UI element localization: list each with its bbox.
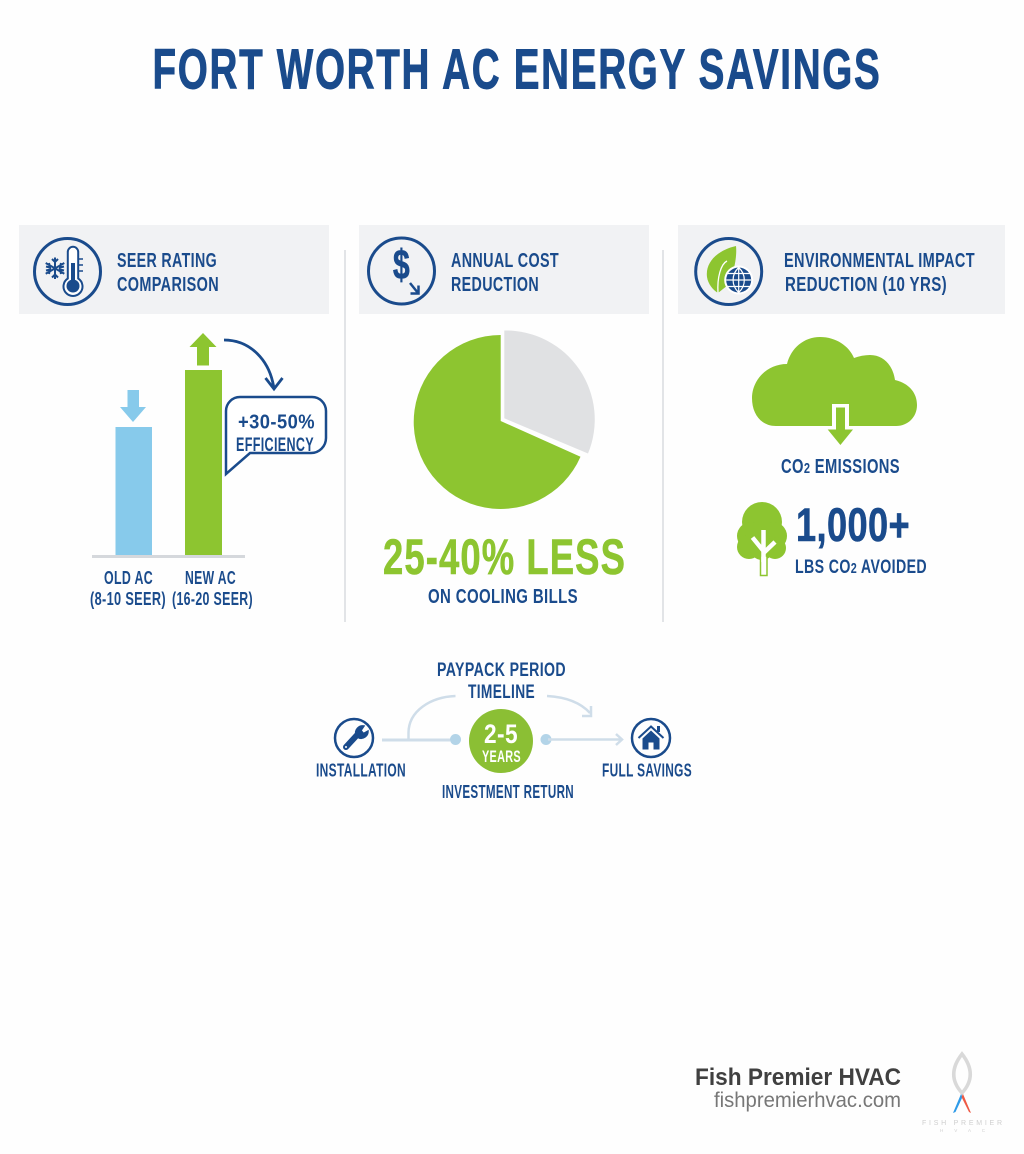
panel header: SEER	[19, 225, 329, 314]
icon: leaf and globe	[696, 238, 762, 304]
panel header: cost	[359, 225, 649, 314]
pie chart	[414, 330, 595, 509]
heading: cost: ANNUAL COST	[451, 249, 559, 272]
badge: 2-5 years: YEARS	[482, 747, 521, 766]
icon: wrench	[335, 719, 373, 757]
stat: 1,000+: 1,000+	[796, 498, 910, 551]
connector: start	[382, 738, 450, 742]
label: old AC: (8-10 SEER)	[90, 588, 166, 609]
badge: 2-5 years	[469, 709, 533, 773]
arrow: up	[190, 333, 216, 366]
label: old AC: OLD AC	[104, 567, 153, 588]
icon: dollar sign with down arrow	[368, 238, 434, 304]
slice: remaining	[504, 330, 595, 454]
label: CO2 emissions: CO2 EMISSIONS	[781, 456, 900, 478]
label: installation: INSTALLATION	[316, 760, 406, 780]
big stat: 25-40% LESS	[383, 529, 626, 585]
panel: environmental impact	[678, 225, 1005, 578]
payback period timeline	[316, 660, 692, 802]
timeline heading: TIMELINE	[468, 682, 535, 703]
stat caption: LBS CO2 AVOIDED	[795, 557, 927, 578]
icon: thermometer and snowflake	[34, 238, 100, 304]
heading: SEER: COMPARISON	[117, 273, 219, 296]
bar: new AC	[185, 370, 222, 555]
arrow: down	[120, 390, 146, 422]
heading: cost: REDUCTION	[451, 273, 539, 296]
icon: dollar sign with down arrow: $	[393, 241, 410, 288]
node: end	[540, 734, 552, 745]
bar chart	[90, 333, 253, 609]
label: full savings: FULL SAVINGS	[602, 760, 692, 780]
stat caption: ON COOLING BILLS	[428, 586, 578, 608]
logo	[922, 1054, 1002, 1133]
node: start	[450, 734, 461, 745]
badge: 2-5 years: 2-5	[484, 719, 518, 749]
arrow: right arc	[547, 696, 591, 716]
icon: house	[632, 719, 670, 757]
brand URL: fishpremierhvac.com	[714, 1089, 901, 1112]
icon: tree	[737, 502, 787, 576]
logo: H V A C	[940, 1128, 986, 1133]
callout: efficiency: EFFICIENCY	[236, 435, 314, 456]
brand name: Fish Premier HVAC	[695, 1064, 901, 1091]
timeline heading: PAYPACK PERIOD	[437, 660, 566, 681]
bar: old AC	[116, 427, 152, 555]
panel header: environment	[678, 225, 1005, 314]
label: new AC: NEW AC	[185, 567, 236, 588]
slice: savings	[414, 335, 580, 509]
heading: environment: REDUCTION (10 YRS)	[785, 273, 947, 296]
arrow: left arc	[408, 696, 456, 741]
arrow: end connector	[548, 734, 622, 745]
label: new AC: (16-20 SEER)	[172, 588, 253, 609]
callout: efficiency	[226, 397, 326, 474]
callout: efficiency: +30-50%	[238, 410, 315, 434]
panel: annual cost reduction	[359, 225, 649, 608]
heading: SEER: SEER RATING	[117, 249, 217, 272]
label: investment return: INVESTMENT RETURN	[442, 781, 574, 802]
arrow: curved to callout	[224, 340, 282, 389]
logo: FISH PREMIER	[922, 1120, 1002, 1127]
icon: cloud with down arrow	[752, 337, 917, 445]
panel: SEER rating comparison	[19, 225, 329, 609]
